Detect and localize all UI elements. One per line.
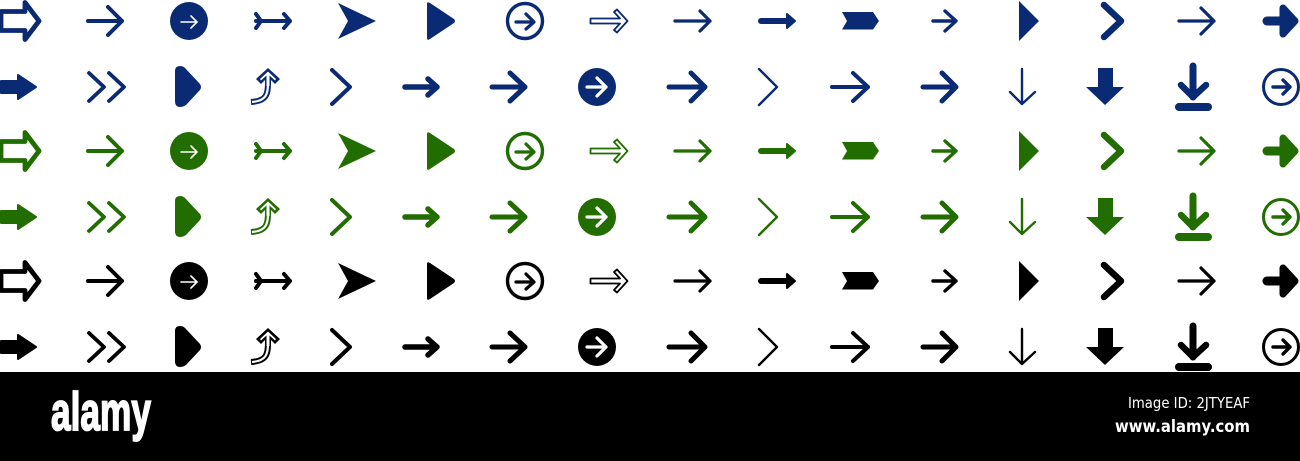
icon: black double chevron bbox=[89, 333, 124, 361]
icon: blue small arrow bbox=[933, 11, 956, 31]
icon: blue feathered arrow bbox=[256, 14, 290, 28]
icon: blue ribbon arrow bbox=[842, 12, 879, 30]
icon: black bold chevron bbox=[1104, 265, 1121, 297]
icon: green rounded pointer bbox=[175, 196, 201, 237]
icon: green filled circle arrow bbox=[170, 132, 208, 170]
icon: green short bold arrow bbox=[761, 144, 795, 158]
icon: green thin arrow bbox=[675, 141, 710, 161]
icon: green arrow bbox=[88, 137, 122, 165]
icon: blue curved up arrow bbox=[251, 68, 280, 102]
icon grid: blue rows bbox=[1, 1, 1298, 111]
icon: blue outline arrow bbox=[1, 2, 39, 40]
icon: blue rounded pointer bbox=[175, 66, 201, 107]
icon: black narrow triangle bbox=[1019, 261, 1039, 301]
icon: green thin chevron bbox=[759, 199, 777, 235]
icon grid: black rows bbox=[1, 261, 1298, 371]
icon: green double chevron bbox=[89, 203, 124, 231]
icon: blue square-tail arrow bbox=[923, 73, 956, 101]
icon: blue download bbox=[1175, 66, 1212, 111]
icon: green chevron bbox=[332, 200, 350, 234]
icon: green ribbon arrow bbox=[842, 142, 879, 160]
icon: black navigation arrow bbox=[338, 263, 376, 299]
icon: green narrow triangle bbox=[1019, 131, 1039, 171]
icon: black triangle bbox=[427, 262, 455, 300]
icon: blue thin down arrow bbox=[1010, 69, 1035, 104]
icon: blue bold arrow bbox=[405, 79, 437, 95]
icon: green long arrow bbox=[669, 203, 705, 231]
icon: black heavy arrow bbox=[1267, 268, 1295, 294]
icon: blue double chevron bbox=[89, 73, 124, 101]
logo: alamy: alamy bbox=[51, 382, 151, 442]
icon: black double-line arrow bbox=[590, 270, 628, 292]
icon: black small arrow bbox=[933, 271, 956, 291]
website url: www.alamy.com bbox=[1115, 417, 1250, 437]
icon: green heavy arrow bbox=[1267, 138, 1295, 164]
icon: black solid down arrow bbox=[1086, 328, 1124, 365]
image id: Image ID: 2JTYEAF bbox=[1128, 394, 1250, 412]
icon: blue heavy arrow bbox=[1267, 8, 1295, 34]
icon: blue slim arrow bbox=[1179, 8, 1214, 34]
icon: blue triangle bbox=[427, 2, 455, 40]
icon: black thin arrow bbox=[675, 271, 710, 291]
icon: blue short bold arrow bbox=[761, 14, 795, 28]
icon: black arrow bbox=[88, 267, 122, 295]
icon: black thin down arrow bbox=[1010, 329, 1035, 364]
icon: green double-line arrow bbox=[590, 140, 628, 162]
icon: black square-tail arrow bbox=[923, 333, 956, 361]
icon: black filled circle arrow bbox=[170, 262, 208, 300]
icon: blue long arrow bbox=[669, 73, 705, 101]
icon: black ribbon arrow bbox=[842, 272, 879, 290]
icon: black solid block arrow bbox=[1, 335, 36, 359]
icon: blue double-line arrow bbox=[590, 10, 628, 32]
icon: black outlined circle arrow bbox=[508, 264, 542, 298]
icon: blue navigation arrow bbox=[338, 3, 376, 39]
icon: black feathered arrow bbox=[256, 274, 290, 288]
icon grid: green rows bbox=[1, 131, 1298, 241]
icon: black medium arrow bbox=[492, 333, 525, 361]
icon: blue long slim arrow bbox=[832, 73, 868, 101]
icon: green square-tail arrow bbox=[923, 203, 956, 231]
icon: green solid block arrow bbox=[1, 205, 36, 229]
icon: green slim arrow bbox=[1179, 138, 1214, 164]
icon: black long arrow bbox=[669, 333, 705, 361]
icon: blue solid down arrow bbox=[1086, 68, 1124, 105]
icon: green long slim arrow bbox=[832, 203, 868, 231]
icon: black outline arrow bbox=[1, 262, 39, 300]
icon: blue outlined circle arrow small bbox=[1264, 70, 1298, 104]
icon: green outline arrow bbox=[1, 132, 39, 170]
icon: black chevron bbox=[332, 330, 350, 364]
icon: black slim arrow bbox=[1179, 268, 1214, 294]
icon: green outlined circle arrow small bbox=[1264, 200, 1298, 234]
footer band bbox=[0, 372, 1300, 461]
icon: blue narrow triangle bbox=[1019, 1, 1039, 41]
icon: green download bbox=[1175, 196, 1212, 241]
icon: blue filled circle bold arrow bbox=[578, 68, 616, 106]
icon: green solid down arrow bbox=[1086, 198, 1124, 235]
icon: black outlined circle arrow small bbox=[1264, 330, 1298, 364]
icon: green bold arrow bbox=[405, 209, 437, 225]
icon: blue thin arrow bbox=[675, 11, 710, 31]
icon: blue bold chevron bbox=[1104, 5, 1121, 37]
icon: green medium arrow bbox=[492, 203, 525, 231]
icon: blue medium arrow bbox=[492, 73, 525, 101]
icon: green triangle bbox=[427, 132, 455, 170]
icon: black download bbox=[1175, 326, 1212, 371]
icon: blue chevron bbox=[332, 70, 350, 104]
icon: green navigation arrow bbox=[338, 133, 376, 169]
icon: blue outlined circle arrow bbox=[508, 4, 542, 38]
icon: black rounded pointer bbox=[175, 326, 201, 367]
icon: black long slim arrow bbox=[832, 333, 868, 361]
icon: black bold arrow bbox=[405, 339, 437, 355]
icon: black thin chevron bbox=[759, 329, 777, 365]
icon: black curved up arrow bbox=[251, 328, 280, 362]
icon: green filled circle bold arrow bbox=[578, 198, 616, 236]
icon: blue filled circle arrow bbox=[170, 2, 208, 40]
icon: blue solid block arrow bbox=[1, 75, 36, 99]
icon: green outlined circle arrow bbox=[508, 134, 542, 168]
icon: green small arrow bbox=[933, 141, 956, 161]
icon: blue thin chevron bbox=[759, 69, 777, 105]
icon: green curved up arrow bbox=[251, 198, 280, 232]
icon: green thin down arrow bbox=[1010, 199, 1035, 234]
icon: green bold chevron bbox=[1104, 135, 1121, 167]
icon: green feathered arrow bbox=[256, 144, 290, 158]
icon: black filled circle bold arrow bbox=[578, 328, 616, 366]
icon: black short bold arrow bbox=[761, 274, 795, 288]
icon: blue arrow bbox=[88, 7, 122, 35]
